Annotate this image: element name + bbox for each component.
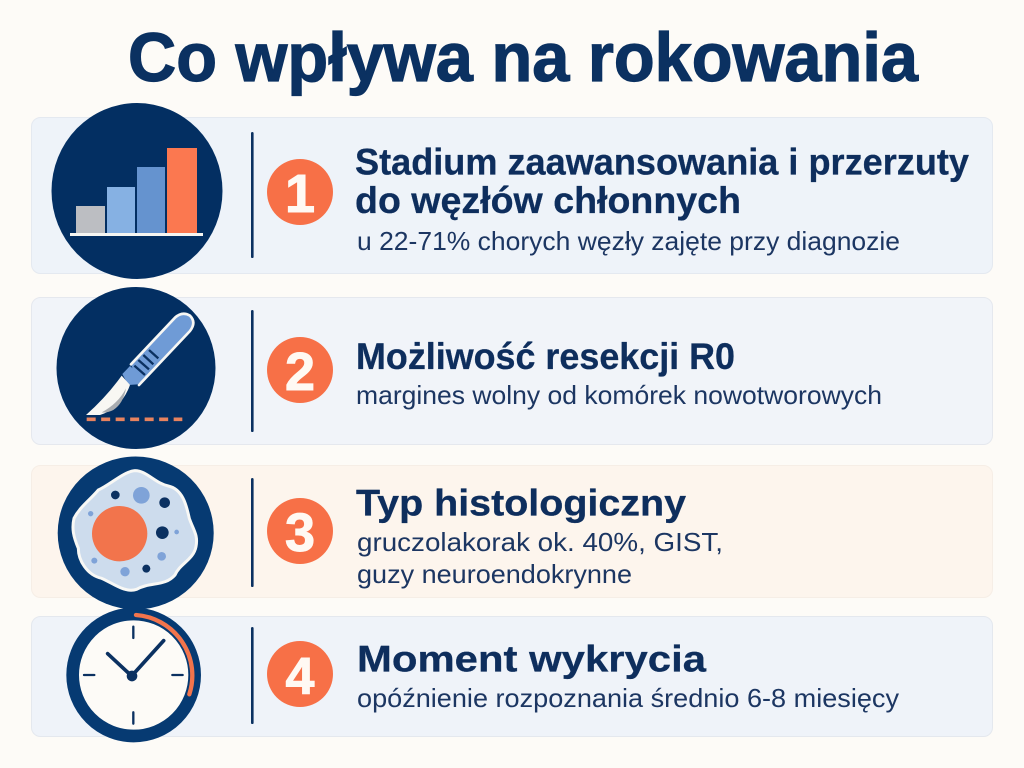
number badge 2: 2	[285, 342, 315, 402]
heading 1	[355, 142, 969, 221]
heading 3: Typ histologiczny	[356, 482, 686, 524]
panel: 3 histological type	[32, 456, 992, 610]
number badge 3: 3	[285, 503, 315, 563]
description 3: gruczolakorak ok. 40%, GIST,	[357, 527, 723, 557]
heading 2: Możliwość resekcji R0	[356, 336, 735, 377]
panel: 4 detection timing	[32, 614, 992, 736]
panel: 2 R0 resection	[32, 287, 992, 449]
description 3: guzy neuroendokrynne	[357, 559, 632, 589]
heading 1: do węzłów chłonnych	[355, 180, 741, 221]
icon: bar chart	[52, 103, 222, 279]
icon: scalpel	[56, 287, 216, 449]
number badge 2	[267, 337, 333, 403]
number badge 1	[267, 159, 333, 225]
number badge 4: 4	[286, 648, 315, 706]
description 4: opóźnienie rozpoznania średnio 6-8 miesięcy	[357, 683, 899, 713]
description 3	[357, 527, 723, 589]
description 1: u 22-71% chorych węzły zajęte przy diagnozie	[357, 226, 900, 256]
number badge 4	[267, 641, 333, 707]
number badge 3	[267, 498, 333, 564]
heading 4: Moment wykrycia	[357, 638, 706, 680]
number badge 1: 1	[285, 164, 315, 224]
icon: clock	[73, 614, 195, 736]
heading 1: Stadium zaawansowania i przerzuty	[355, 142, 969, 182]
description 2: margines wolny od komórek nowotworowych	[356, 380, 882, 410]
icon: cell	[58, 456, 214, 610]
title: Co wpływa na rokowania	[128, 19, 919, 96]
panel: 1 stage and lymph nodes	[32, 103, 992, 279]
